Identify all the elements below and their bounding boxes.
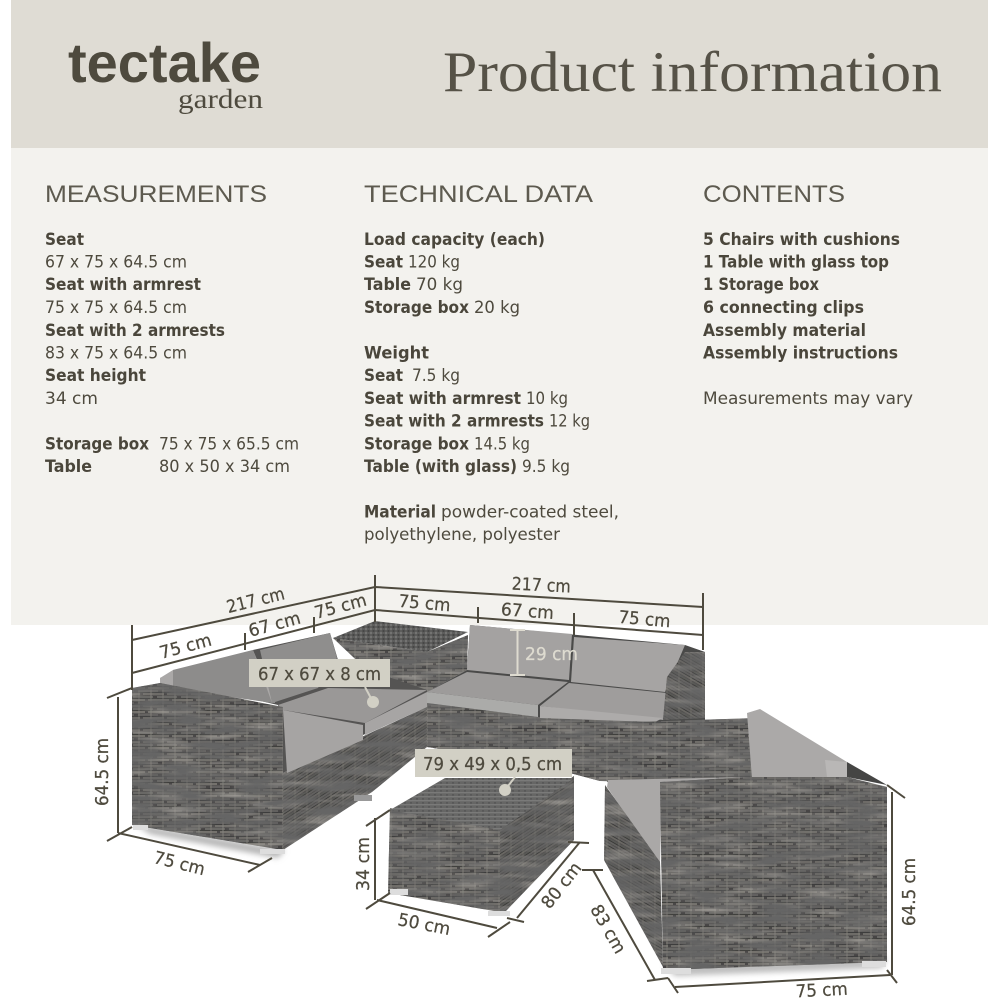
panel: measurements column <box>45 181 299 477</box>
text block: contents list: 6 connecting clips <box>703 298 864 318</box>
dimension labels: 50 cm <box>396 910 452 940</box>
text block: measurements list: 83 x 75 x 64.5 cm <box>45 344 187 364</box>
text block: measurements list: Seat with 2 armrests <box>45 321 225 341</box>
dimension labels: 217 cm <box>511 574 571 598</box>
callout: glass top size: 79 x 49 x 0,5 cm <box>423 755 562 775</box>
text block: weight: 10 kg <box>526 389 568 409</box>
text block: weight: 12 kg <box>549 412 590 432</box>
callout: backrest height: 29 cm <box>525 645 578 665</box>
dimension labels: 64.5 cm <box>93 738 113 806</box>
callout: glass top size <box>415 749 572 796</box>
text block: weight <box>364 344 590 477</box>
panel: contents column <box>703 181 913 409</box>
text block: measurements list: Storage box <box>45 434 149 454</box>
logo: tectake garden: garden <box>178 84 264 114</box>
text block: contents list <box>703 230 900 364</box>
heading: technical data: TECHNICAL DATA <box>364 181 593 208</box>
product: single armchair <box>603 709 887 976</box>
dimension labels <box>93 574 920 1000</box>
text block: contents list: 1 Storage box <box>703 275 819 295</box>
text block: load capacity: 20 kg <box>474 298 520 318</box>
product: coffee table <box>388 776 574 916</box>
text block: weight: Seat with 2 armrests <box>364 412 544 432</box>
dimension labels: 34 cm <box>354 837 374 891</box>
heading: contents: CONTENTS <box>703 181 845 208</box>
text block: load capacity: Load capacity (each) <box>364 230 545 250</box>
text block: weight: 9.5 kg <box>522 457 570 477</box>
text block: material <box>364 502 619 545</box>
dimension lines: corner sofa <box>107 575 703 872</box>
text block: measurements list: 67 x 75 x 64.5 cm <box>45 252 187 272</box>
text block: load capacity: 70 kg <box>416 275 463 295</box>
right sofa section <box>427 625 705 782</box>
dimension labels: 83 cm <box>585 902 629 957</box>
text block: measurements list: 34 cm <box>45 389 98 409</box>
left sofa section <box>132 633 427 858</box>
text block: weight: Storage box <box>364 434 469 454</box>
panel: information background <box>11 148 988 625</box>
text block: measurements list: 75 x 75 x 65.5 cm <box>159 434 299 454</box>
logo: tectake garden: tectake <box>68 31 261 94</box>
text block: note: Measurements may vary <box>703 389 913 409</box>
dimension labels: 80 cm <box>538 859 586 913</box>
text block: measurements list: Table <box>45 457 92 477</box>
dimension lines: armchair <box>582 785 905 993</box>
text block: contents list: Assembly instructions <box>703 344 898 364</box>
text block: weight: Seat with armrest <box>364 389 521 409</box>
text block: load capacity <box>364 230 545 318</box>
text block: measurements list: 75 x 75 x 64.5 cm <box>45 298 187 318</box>
panel: header band <box>11 0 988 148</box>
dimension labels: 75 cm <box>313 591 369 624</box>
callout: cushion size <box>249 659 390 708</box>
dimension labels: 64.5 cm <box>900 858 920 926</box>
text block: weight: Table (with glass) <box>364 457 517 477</box>
text block: weight: Weight <box>364 344 429 364</box>
dimension labels: 217 cm <box>225 584 287 618</box>
callout: backrest height <box>510 630 578 675</box>
panel: technical data column <box>364 181 619 545</box>
text block: measurements list: Seat with armrest <box>45 275 201 295</box>
callout: cushion size: 67 x 67 x 8 cm <box>258 665 381 685</box>
dimension labels: 75 cm <box>152 848 207 880</box>
text block: load capacity: 120 kg <box>408 252 460 272</box>
product: corner sofa <box>132 621 705 858</box>
dimension labels: 67 cm <box>247 609 303 642</box>
text block: weight: Seat <box>364 366 403 386</box>
text block: measurements list: 80 x 50 x 34 cm <box>159 457 290 477</box>
text block: contents list: 5 Chairs with cushions <box>703 230 900 250</box>
dimension labels: 67 cm <box>500 600 554 624</box>
text block: contents list: 1 Table with glass top <box>703 252 889 272</box>
text block: material: Material <box>364 502 436 522</box>
text block: measurements list <box>45 230 299 477</box>
title: Product information <box>443 41 942 104</box>
text block: measurements list: Seat <box>45 230 84 250</box>
text block: contents list: Assembly material <box>703 321 866 341</box>
storage box <box>333 621 468 692</box>
dimension lines: table <box>366 810 589 937</box>
text block: weight: 7.5 kg <box>412 366 460 386</box>
text block: weight: 14.5 kg <box>474 434 530 454</box>
dimension labels: 75 cm <box>618 608 671 632</box>
text block: material: powder-coated steel, <box>441 502 619 522</box>
heading: measurements: MEASUREMENTS <box>45 181 267 208</box>
dimension labels: 75 cm <box>398 592 451 616</box>
dimension labels: 75 cm <box>158 631 214 664</box>
text block: load capacity: Seat <box>364 252 403 272</box>
text block: load capacity: Table <box>364 275 411 295</box>
text block: measurements list: Seat height <box>45 366 146 386</box>
text block: material: polyethylene, polyester <box>364 525 560 545</box>
text block: load capacity: Storage box <box>364 298 469 318</box>
